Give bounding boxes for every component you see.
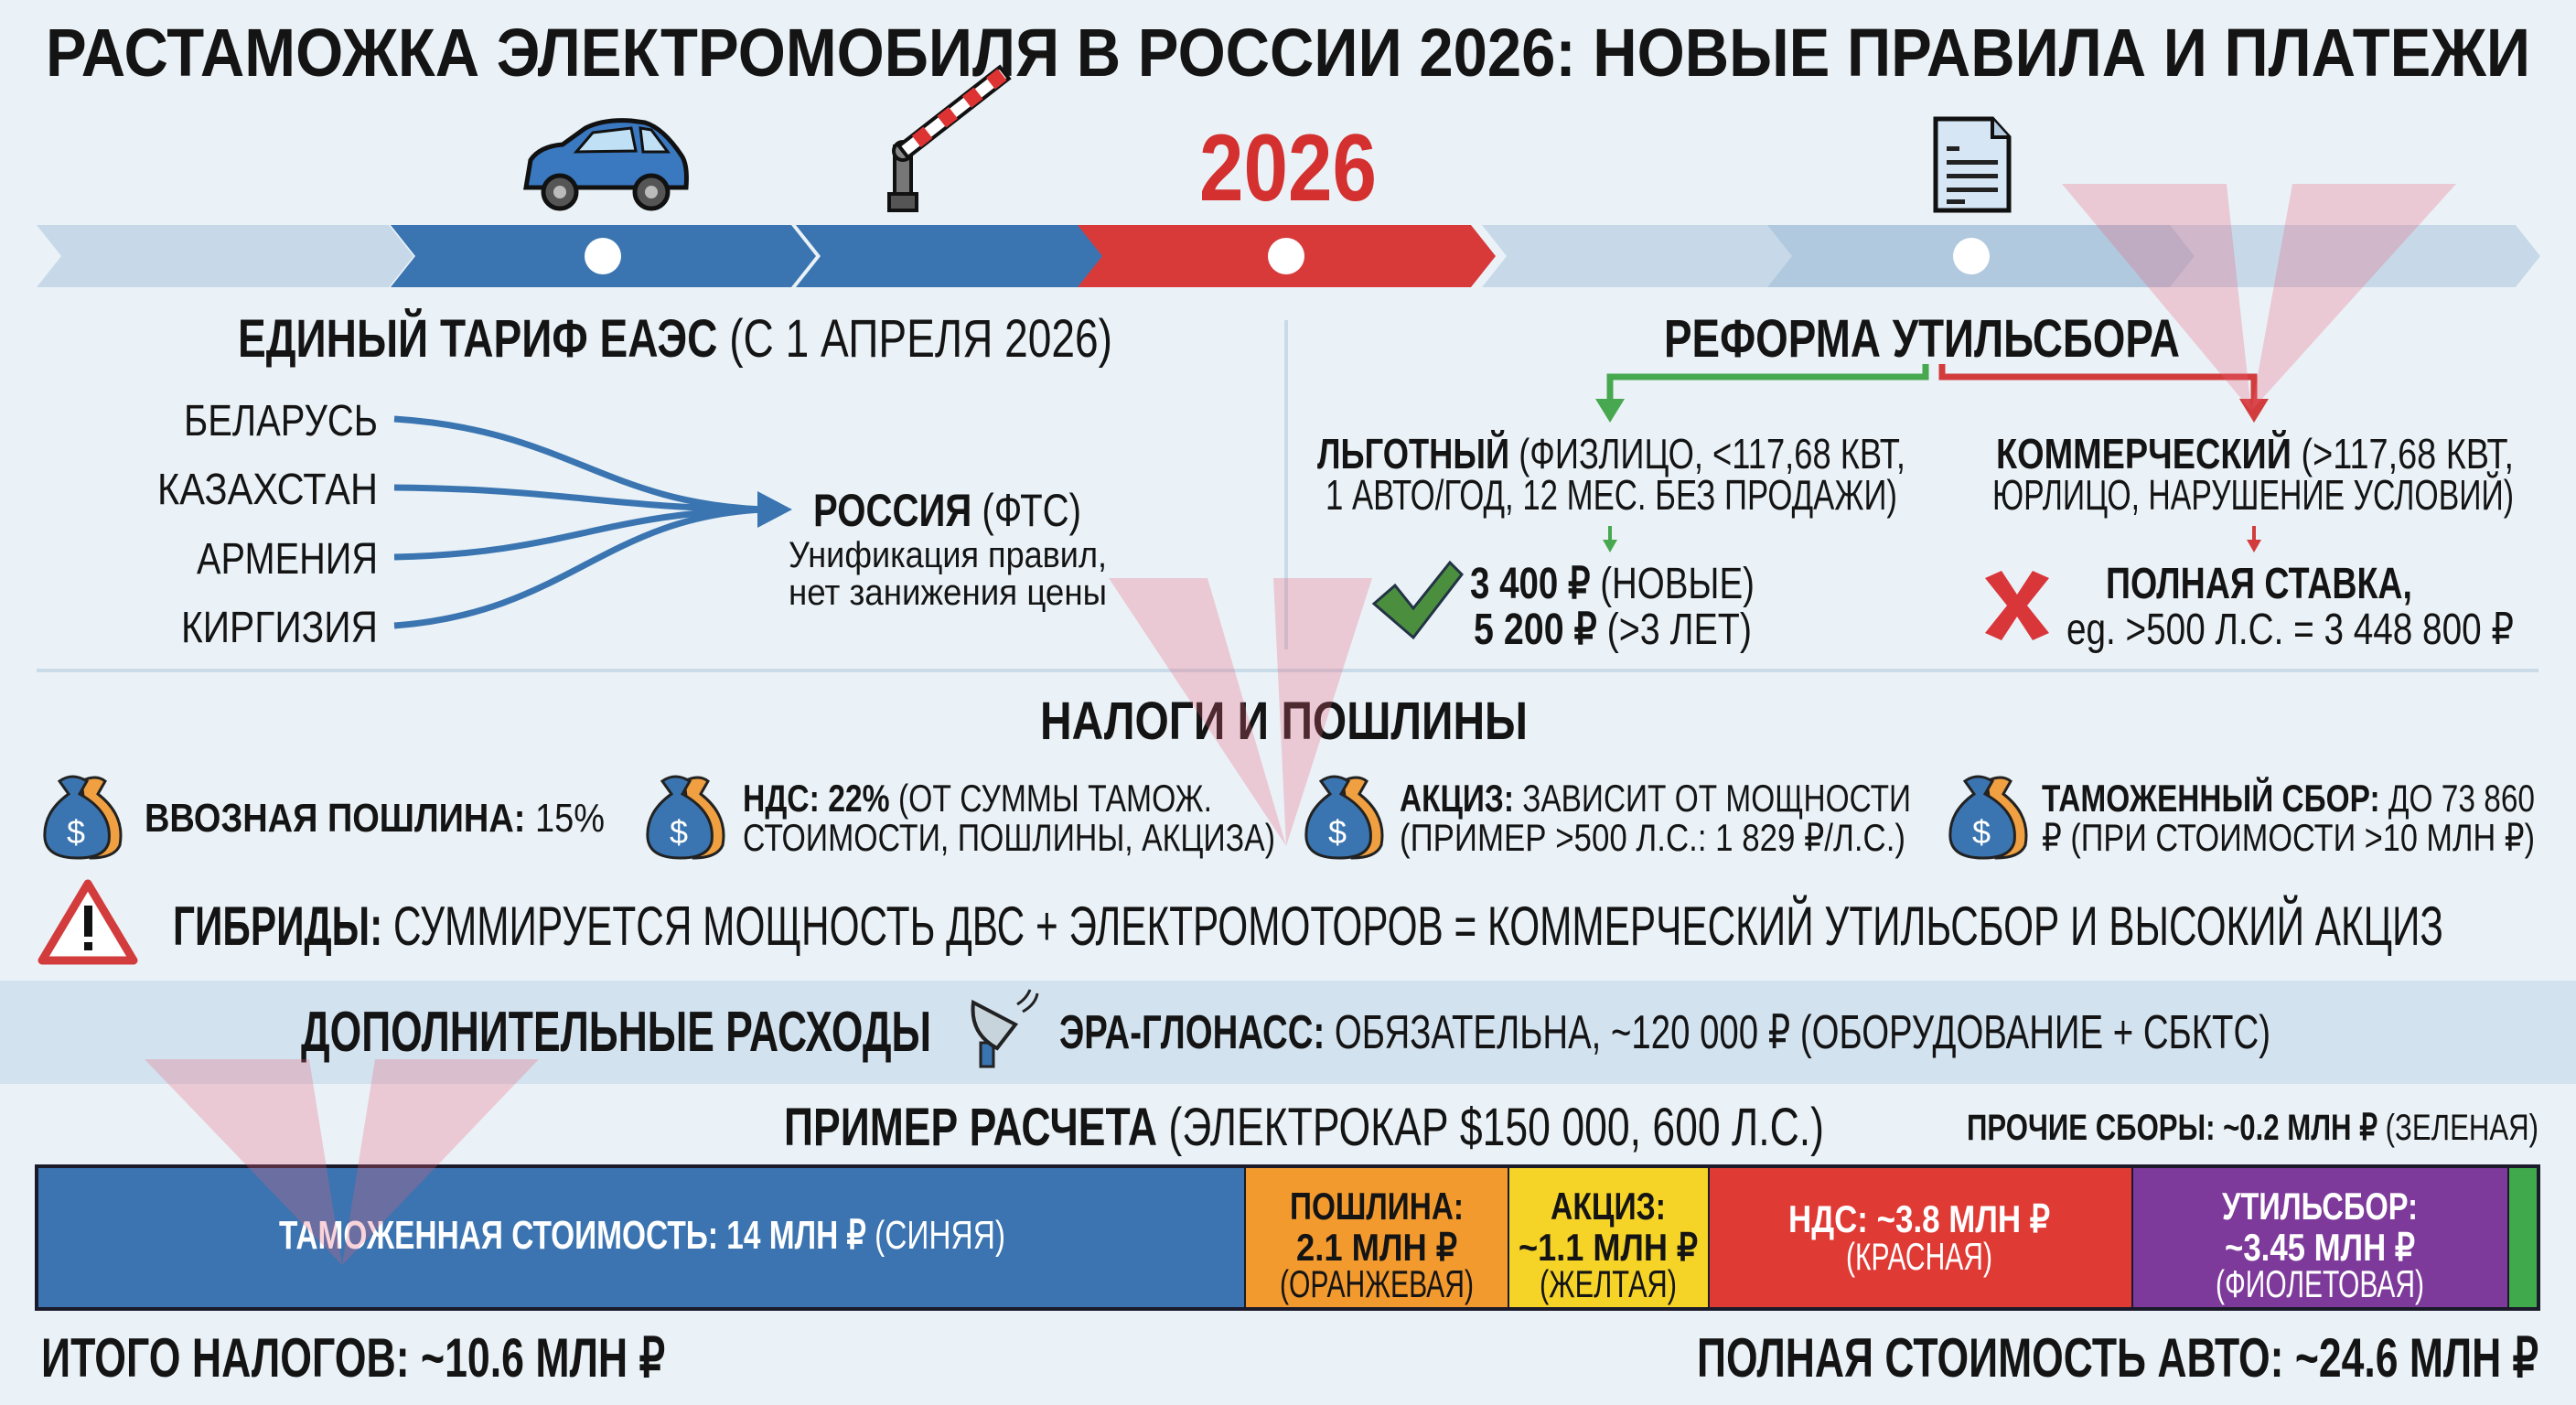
stacked bar chart: НДС: ~3.8 МЛН ₽ — [1788, 1197, 2050, 1240]
country list: АРМЕНИЯ — [197, 535, 378, 584]
arrows: countries to Russia — [394, 419, 792, 626]
additional costs band: ЭРА-ГЛОНАСС: ОБЯЗАТЕЛЬНА, ~120 000 ₽ (ОБОРУДОВАНИЕ + СБКТС) — [1059, 1006, 2270, 1059]
arrows: reform branches — [1595, 364, 2269, 423]
stacked bar chart: ТАМОЖЕННАЯ СТОИМОСТЬ: 14 МЛН ₽ (СИНЯЯ) — [279, 1213, 1005, 1258]
tax item: customs fee: $ — [1972, 813, 1991, 851]
stacked bar chart: ПОШЛИНА: — [1290, 1185, 1464, 1228]
tax item: import duty: $ — [67, 813, 85, 851]
stacked bar chart: 2.1 МЛН ₽ — [1296, 1226, 1457, 1269]
preferential block: 5 200 ₽ (>3 ЛЕТ) — [1474, 606, 1752, 654]
timeline — [37, 225, 2540, 287]
preferential block: 3 400 ₽ (НОВЫЕ) — [1470, 560, 1755, 608]
tax item: VAT: СТОИМОСТИ, ПОШЛИНЫ, АКЦИЗА) — [743, 816, 1275, 859]
icon: barrier — [889, 67, 1009, 210]
year 2026: 2026 — [1199, 115, 1377, 221]
additional costs band — [0, 981, 2576, 1084]
tax item: VAT: $ — [670, 813, 688, 851]
tax item: excise — [1306, 777, 1911, 859]
stacked bar chart: АКЦИЗ: — [1551, 1185, 1666, 1228]
icon: car — [526, 121, 686, 209]
Russia FTS block: Унификация правил, — [789, 535, 1107, 575]
calculation heading: ПРИМЕР РАСЧЕТА (ЭЛЕКТРОКАР $150 000, 600 Л.С.) — [784, 1098, 1824, 1157]
country list: КАЗАХСТАН — [157, 466, 378, 514]
stacked bar chart: (ЖЕЛТАЯ) — [1540, 1262, 1677, 1305]
tax item: excise: $ — [1328, 813, 1347, 851]
Russia FTS block: нет занижения цены — [789, 573, 1107, 613]
tax item: customs fee: ТАМОЖЕННЫЙ СБОР: ДО 73 860 — [2042, 776, 2535, 820]
stacked bar chart: УТИЛЬСБОР: — [2222, 1185, 2418, 1228]
preferential block — [1317, 430, 1905, 654]
icon: document — [1936, 119, 2009, 210]
heading: taxes and duties: НАЛОГИ И ПОШЛИНЫ — [1040, 692, 1528, 751]
additional costs band: ДОПОЛНИТЕЛЬНЫЕ РАСХОДЫ — [301, 1001, 931, 1064]
commercial block: ПОЛНАЯ СТАВКА, — [2106, 560, 2412, 608]
heading: utilization fee reform: РЕФОРМА УТИЛЬСБОРА — [1664, 309, 2180, 369]
tax item: VAT — [648, 777, 1275, 859]
country list: БЕЛАРУСЬ — [184, 397, 378, 445]
tax item: excise: (ПРИМЕР >500 Л.С.: 1 829 ₽/Л.С.) — [1400, 816, 1905, 859]
Russia FTS block: РОССИЯ (ФТС) — [813, 485, 1081, 536]
icon: satellite dish — [973, 990, 1037, 1067]
stacked bar chart — [37, 1166, 2538, 1309]
tax item: VAT: НДС: 22% (ОТ СУММЫ ТАМОЖ. — [743, 777, 1212, 820]
preferential block: 1 АВТО/ГОД, 12 МЕС. БЕЗ ПРОДАЖИ) — [1326, 471, 1897, 519]
stacked bar chart: (КРАСНАЯ) — [1846, 1235, 1992, 1278]
tax item: import duty — [45, 777, 605, 858]
overlay: pink wedge marks — [145, 184, 2456, 1265]
stacked bar chart: (ФИОЛЕТОВАЯ) — [2216, 1262, 2424, 1305]
other fees note: ПРОЧИЕ СБОРЫ: ~0.2 МЛН ₽ (ЗЕЛЕНАЯ) — [1967, 1108, 2538, 1148]
tax item: customs fee — [1950, 776, 2535, 859]
preferential block: ЛЬГОТНЫЙ (ФИЗЛИЦО, <117,68 КВТ, — [1317, 430, 1905, 477]
heading: EAEU tariff: ЕДИНЫЙ ТАРИФ ЕАЭС (С 1 АПРЕЛЯ 2026) — [238, 309, 1112, 369]
country list: КИРГИЗИЯ — [181, 604, 378, 652]
Russia FTS block — [789, 485, 1107, 613]
stacked bar chart: ~1.1 МЛН ₽ — [1519, 1226, 1698, 1269]
commercial block: КОММЕРЧЕСКИЙ (>117,68 КВТ, — [1996, 430, 2514, 477]
total taxes: ИТОГО НАЛОГОВ: ~10.6 МЛН ₽ — [41, 1327, 665, 1389]
stacked bar chart: ~3.45 МЛН ₽ — [2225, 1226, 2415, 1269]
stacked bar chart: (ОРАНЖЕВАЯ) — [1280, 1262, 1474, 1305]
commercial block — [1985, 430, 2514, 654]
tax item: import duty: ВВОЗНАЯ ПОШЛИНА: 15% — [145, 796, 605, 841]
tax item: excise: АКЦИЗ: ЗАВИСИТ ОТ МОЩНОСТИ — [1400, 777, 1911, 820]
country list — [157, 397, 378, 652]
